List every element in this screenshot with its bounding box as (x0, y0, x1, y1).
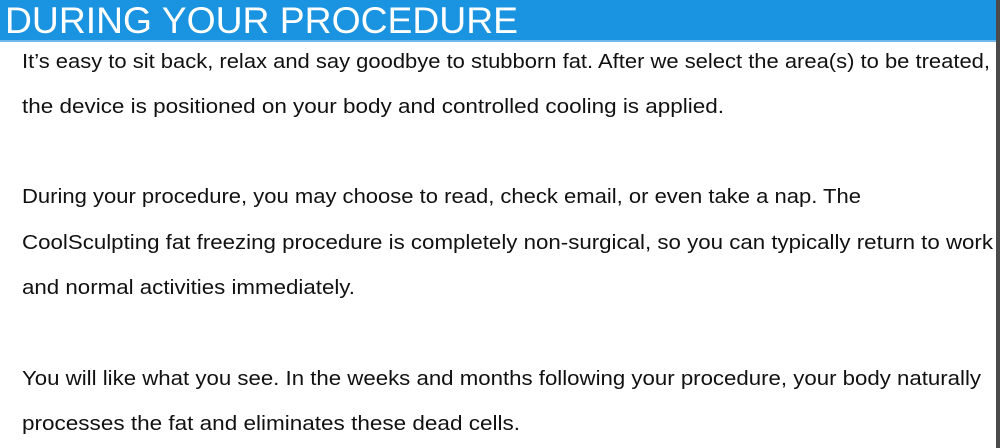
text block: paragraph 2: and normal activities immediately. (22, 277, 355, 299)
text block: paragraph 3: processes the fat and eliminates these dead cells. (22, 413, 520, 435)
header bar (0, 0, 996, 42)
text block: paragraph 2: During your procedure, you may choose to read, check email, or even take a nap. The (22, 186, 861, 208)
text block: paragraph 2 (22, 186, 994, 299)
text block: paragraph 3 (22, 368, 981, 435)
text block: paragraph 1 (22, 51, 990, 118)
text block: paragraph 1: the device is positioned on your body and controlled cooling is applied. (22, 96, 724, 118)
title: DURING YOUR PROCEDURE (5, 0, 518, 41)
text block: paragraph 2: CoolSculpting fat freezing procedure is completely non-surgical, so you can typically return to work (22, 232, 994, 254)
text block: paragraph 3: You will like what you see. In the weeks and months following your procedure, your body naturally (22, 368, 981, 390)
text block: paragraph 1: It’s easy to sit back, relax and say goodbye to stubborn fat. After we select the area(s) to be treated, (22, 51, 990, 73)
right edge strip (996, 0, 1000, 448)
